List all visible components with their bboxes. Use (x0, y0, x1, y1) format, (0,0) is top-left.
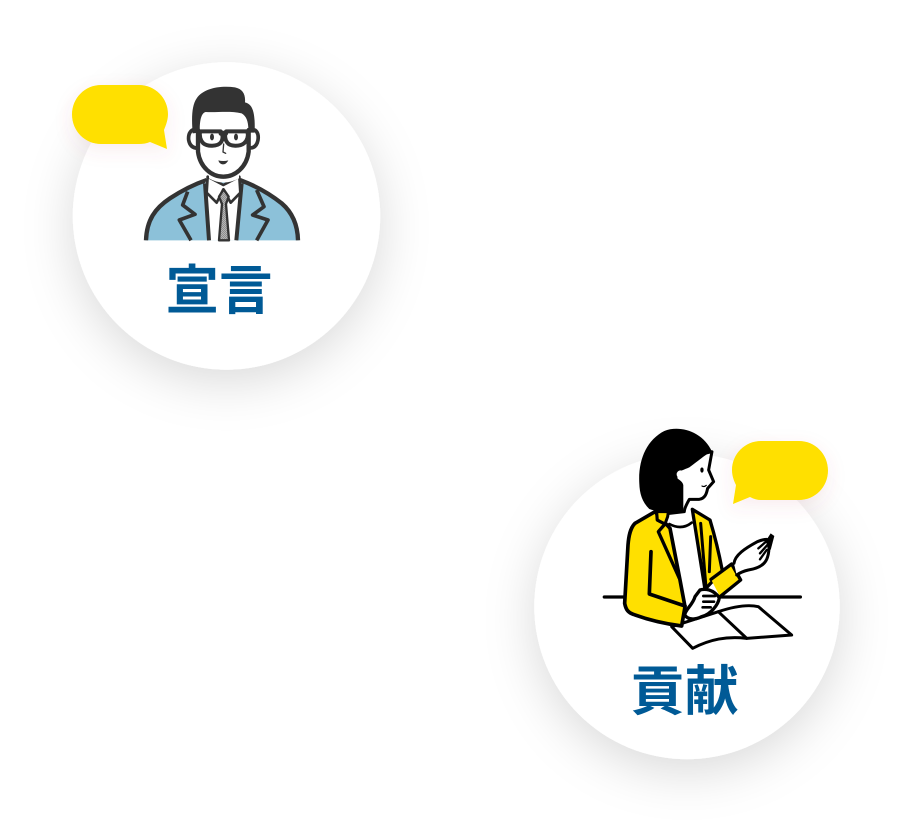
face outline (198, 130, 249, 177)
icon: woman body at desk (604, 509, 800, 648)
collar (207, 177, 240, 203)
hair (639, 429, 712, 512)
pen (765, 533, 774, 550)
smile (702, 485, 706, 487)
face and neck (669, 452, 714, 513)
desk line (604, 592, 800, 602)
glasses (200, 131, 248, 146)
jacket fill (145, 180, 299, 240)
collar top (657, 512, 668, 524)
fingers lower (703, 596, 715, 607)
arm fold (649, 552, 685, 606)
open notebook (672, 606, 792, 648)
panel: 貢献 (534, 429, 840, 759)
lapels (179, 190, 268, 240)
neckline (669, 523, 692, 527)
neck (209, 168, 239, 182)
fingers raised (758, 542, 767, 559)
speech bubble: yellow left (72, 85, 168, 149)
jacket outline (146, 180, 298, 240)
panel: 宣言 (72, 62, 380, 370)
icon: man in blue suit (145, 87, 299, 240)
raised hand (734, 539, 769, 575)
sleeve (711, 564, 741, 597)
inner white top (668, 517, 705, 607)
mouth (218, 160, 228, 164)
eye (700, 467, 704, 473)
heading: 貢献: 貢献 (630, 662, 738, 722)
jacket left side (625, 512, 685, 626)
ears (189, 130, 258, 148)
shirt (206, 182, 241, 240)
nose (223, 144, 226, 153)
ear (677, 470, 685, 478)
jacket right side (692, 509, 722, 589)
white circle 貢献 (534, 454, 840, 759)
hair (192, 87, 255, 133)
heading: 宣言: 宣言 (166, 262, 272, 321)
speech bubble: yellow right (732, 441, 828, 504)
icon: woman head (639, 429, 714, 513)
face fill (197, 113, 249, 177)
collar (657, 512, 679, 578)
white circle 宣言 (73, 62, 380, 370)
eyes (210, 134, 214, 140)
tie (219, 189, 229, 240)
shirt edges (205, 183, 242, 240)
notebook spine (718, 612, 747, 638)
lower hand (685, 589, 719, 619)
lapel line (701, 523, 711, 587)
